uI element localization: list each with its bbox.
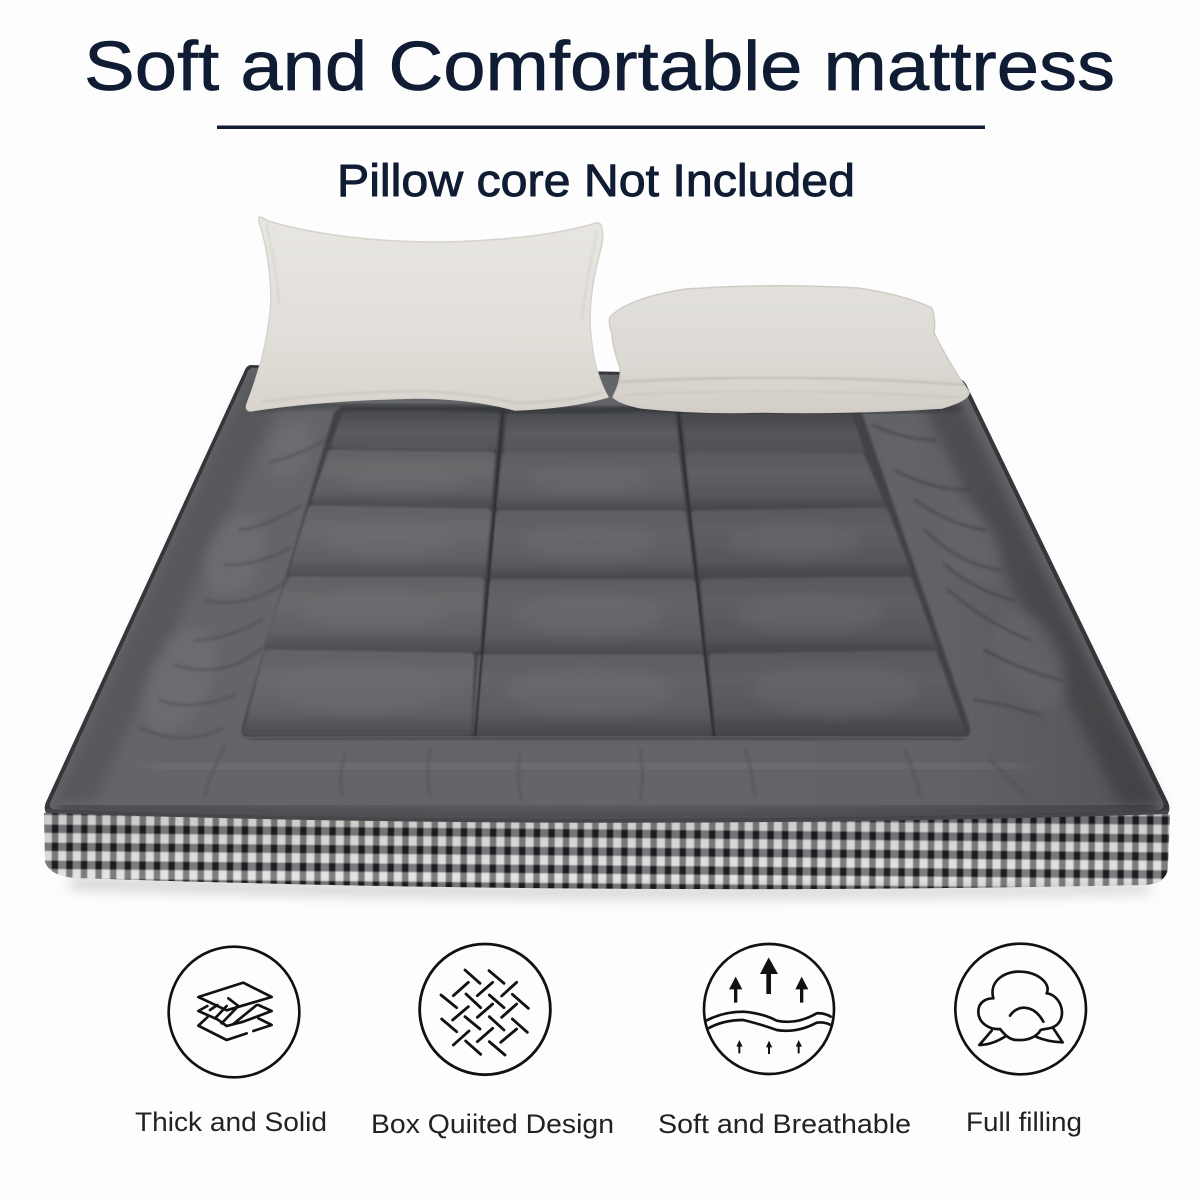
fabric wrinkles bbox=[140, 425, 1060, 800]
column seams bbox=[475, 410, 714, 737]
icon: layers, Thick and Solid bbox=[169, 947, 299, 1077]
pillow contact shadow bbox=[255, 405, 960, 413]
left roll lobes bbox=[130, 414, 321, 743]
cell puff highlights bbox=[276, 465, 919, 716]
mattress bbox=[40, 365, 1175, 900]
right pillow flange bbox=[620, 378, 965, 385]
left pillow bbox=[246, 217, 608, 411]
title divider bbox=[217, 126, 985, 129]
subtitle: Pillow core Not Included bbox=[337, 155, 855, 206]
right roll lobes bbox=[878, 419, 1079, 720]
right side shading bbox=[700, 382, 1162, 820]
title: Soft and Comfortable mattress bbox=[84, 27, 1115, 105]
label: Soft and Breathable: Soft and Breathable bbox=[658, 1109, 911, 1139]
right edge shading bbox=[920, 384, 1160, 806]
side and front roll bbox=[50, 368, 1164, 819]
label: Thick and Solid: Thick and Solid bbox=[135, 1107, 327, 1137]
icon: airflow arrows, Soft and Breathable bbox=[704, 944, 834, 1074]
mattress silhouette bbox=[45, 365, 1169, 826]
piping seam bbox=[46, 812, 1168, 822]
quilted panel crease bbox=[243, 408, 969, 738]
quilted cells bbox=[248, 416, 960, 731]
front roll lower shading bbox=[60, 808, 1155, 817]
front roll top highlight bbox=[244, 736, 968, 738]
floor shadow bbox=[70, 878, 1150, 897]
icon: quilted weave, Box Quilted Design bbox=[420, 944, 550, 1075]
label: Box Quiited Design: Box Quiited Design bbox=[371, 1109, 614, 1139]
icon: cotton boll, Full filling bbox=[955, 944, 1086, 1074]
gingham side band bbox=[44, 813, 1170, 890]
icons row bbox=[169, 944, 1086, 1077]
label: Full filling: Full filling bbox=[966, 1107, 1082, 1137]
left edge shading bbox=[54, 372, 280, 804]
right pillow bbox=[609, 286, 969, 412]
front roll highlight bbox=[150, 765, 1030, 767]
left pillow seam bbox=[262, 391, 602, 403]
